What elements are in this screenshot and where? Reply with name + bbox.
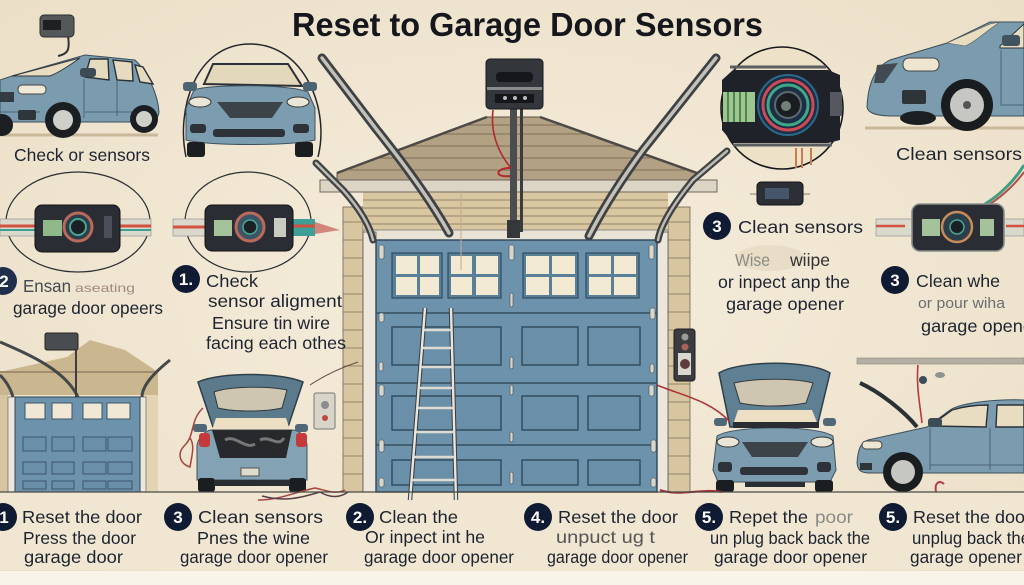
- title: Reset to Garage Door Sensors: [292, 6, 763, 43]
- sensor: centre left: [173, 172, 340, 272]
- step 1: reset the door: Reset the door: [22, 507, 142, 527]
- step 3: clean with: [881, 266, 1024, 336]
- step: ensure opener (2): aseating: [75, 281, 135, 295]
- sensor: right: [876, 165, 1024, 251]
- step 3: clean with: Clean whe: [916, 271, 1000, 291]
- step 1: check sensor alignment: [172, 265, 346, 353]
- central garage illustration: [316, 58, 727, 500]
- sensor: left: [0, 172, 151, 272]
- step 2: clean the: [346, 503, 514, 567]
- door trim: [363, 230, 668, 492]
- step 3: clean with: or pour wiha: [918, 295, 1006, 312]
- step 1: reset the door: garage door: [24, 547, 123, 567]
- step 5: repeat the door: poor: [815, 507, 853, 527]
- small door windows: [25, 403, 130, 419]
- roof: [320, 117, 717, 192]
- step 4: reset the door: garage door opener: [547, 547, 688, 567]
- top right: side-view car: [865, 22, 1024, 131]
- step 3: clean with: 3: [890, 271, 900, 290]
- step 5: reset the door: [879, 503, 1024, 567]
- step: ensure opener (2): [0, 267, 163, 318]
- step 5: reset the door: 5.: [886, 508, 900, 527]
- camera with cable: [40, 15, 74, 56]
- small door panels: [23, 437, 132, 489]
- step 1: check sensor alignment: Ensure tin wire: [212, 313, 330, 333]
- top centre-left: front car in circle: [183, 44, 321, 157]
- thin wire: [460, 190, 462, 270]
- overhead tracks: [316, 58, 727, 240]
- step 5: repeat the door: 5.: [702, 508, 716, 527]
- step 5: repeat the door: garage door opener: [714, 547, 867, 567]
- door windows: [392, 253, 639, 298]
- step: ensure opener (2): Ensan: [23, 276, 71, 296]
- step 3: clean sensors: [703, 212, 863, 314]
- step 3: clean sensors: garage door opener: [180, 547, 328, 567]
- red wires right: [657, 385, 730, 493]
- step 4: reset the door: 4.: [531, 508, 545, 527]
- step 5: reset the door: garage opener: [910, 547, 1022, 567]
- loose wires: [180, 408, 348, 500]
- step 1: check sensor alignment: sensor aligment: [208, 291, 342, 311]
- bottom centre-left: car with open trunk: [193, 374, 308, 492]
- step 3: clean sensors: Pnes the wine: [197, 528, 310, 548]
- step 1: reset the door: [0, 503, 142, 567]
- step 2: clean the: 2.: [353, 508, 367, 527]
- step 1: check sensor alignment: facing each othes: [206, 333, 346, 353]
- door hinges: [379, 245, 656, 487]
- step 1: reset the door: Press the door: [23, 528, 136, 548]
- keypad right: [674, 329, 695, 381]
- step 5: repeat the door: un plug back back the: [710, 528, 870, 548]
- bottom centre-right: car with open hood: [713, 363, 836, 492]
- wall switch left: [310, 362, 358, 429]
- garage siding walls: [343, 192, 690, 492]
- step 1: check sensor alignment: 1.: [179, 270, 193, 289]
- small sensor: [750, 182, 810, 205]
- garage door opener: [486, 59, 543, 238]
- step 3: clean sensors: 3: [712, 217, 722, 236]
- step 3: clean sensors: 3: [173, 508, 183, 527]
- step 5: repeat the door: Repet the: [729, 507, 808, 527]
- step 2: clean the: Clean the: [379, 507, 458, 527]
- magnified sensor circle: [721, 47, 843, 169]
- step 3: clean sensors: Wise: [735, 250, 770, 270]
- step 3: clean sensors: Clean sensors: [738, 217, 863, 237]
- step 3: clean sensors: garage opener: [726, 294, 844, 314]
- ladder: [410, 308, 456, 500]
- step 3: clean sensors: Clean sensors: [198, 507, 323, 527]
- garage door: [376, 240, 657, 492]
- bottom right: side-view car with open hood: [857, 358, 1024, 492]
- label: clean sensors: Clean sensors: [896, 144, 1022, 164]
- step 4: reset the door: Reset the door: [558, 507, 678, 527]
- door panels: [392, 327, 640, 485]
- step 4: reset the door: unpuct ug t: [556, 527, 655, 547]
- step 1: check sensor alignment: Check: [206, 271, 258, 291]
- step 2: clean the: Or inpect int he: [365, 527, 485, 547]
- step: ensure opener (2): garage door opeers: [13, 298, 163, 318]
- step 2: clean the: garage door opener: [364, 547, 514, 567]
- bottom left: small garage: [0, 333, 170, 492]
- step 5: repeat the door: [695, 503, 870, 567]
- step 3: clean sensors: [164, 503, 328, 567]
- step 3: clean sensors: wiipe: [789, 250, 830, 270]
- step 4: reset the door: [524, 503, 688, 567]
- label: check sensors: Check or sensors: [14, 145, 150, 165]
- step 3: clean sensors: or inpect anp the: [718, 272, 850, 292]
- bottom steps: [0, 503, 1024, 567]
- floor line: [0, 491, 1024, 493]
- top left: side-view car: [0, 15, 159, 138]
